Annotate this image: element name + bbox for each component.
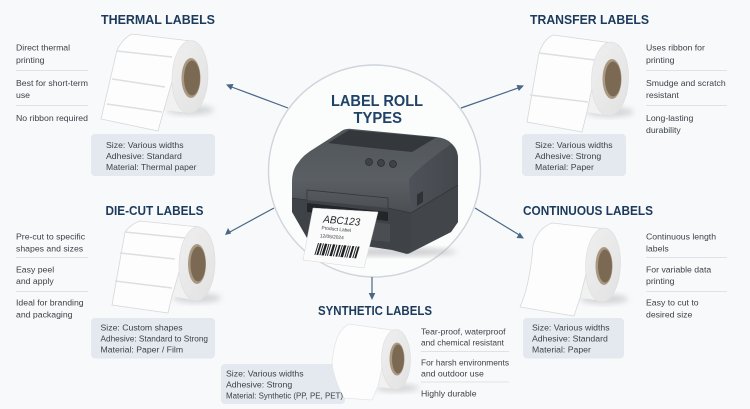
feature list: thermal: printing xyxy=(16,55,45,65)
feature list: continuous: Continuous length xyxy=(646,232,716,242)
printer xyxy=(292,129,458,268)
feature list: transfer: printing xyxy=(646,55,675,65)
feature list: continuous: printing xyxy=(646,276,675,286)
spec box: continuous xyxy=(523,318,624,358)
feature list: thermal xyxy=(16,42,88,123)
feature list: continuous: desired size xyxy=(646,310,693,320)
feature list: continuous: Easy to cut to xyxy=(646,298,699,308)
arrow: to synthetic labels xyxy=(369,277,375,300)
feature list: transfer xyxy=(646,42,727,135)
feature list: transfer: Smudge and scratch xyxy=(646,78,726,88)
printer right side xyxy=(409,144,458,213)
arrow: to continuous labels xyxy=(475,208,524,238)
printer slot xyxy=(307,203,388,221)
panel: die-cut labels xyxy=(16,204,221,358)
feature list: thermal: Direct thermal xyxy=(16,42,70,52)
feature list: transfer: durability xyxy=(646,125,681,135)
panel: thermal labels xyxy=(16,13,215,176)
spec text: synthetic: Material: Synthetic (PP, PE, PET) xyxy=(226,390,343,400)
spec text: synthetic: Size: Various widths xyxy=(226,368,304,378)
spec box: thermal: Material: Thermal paper xyxy=(106,162,197,172)
printer window xyxy=(328,130,436,152)
spec box: transfer xyxy=(522,134,626,176)
heading: thermal labels: THERMAL LABELS xyxy=(101,13,215,27)
heading: transfer labels: TRANSFER LABELS xyxy=(530,13,649,27)
spec box: transfer: Material: Paper xyxy=(535,162,594,172)
spec box: die-cut: Material: Paper / Film xyxy=(100,344,183,354)
heading: continuous labels: CONTINUOUS LABELS xyxy=(523,204,653,218)
arrow: to die-cut labels xyxy=(225,208,274,235)
feature list: die-cut: and packaging xyxy=(16,310,73,320)
panel: continuous labels xyxy=(520,204,727,358)
spec box: die-cut: Size: Custom shapes xyxy=(100,322,183,332)
feature list: die-cut: Easy peel xyxy=(16,264,54,274)
barcode xyxy=(314,243,360,258)
printer port xyxy=(417,191,423,206)
icon: transfer label roll xyxy=(527,35,634,132)
label text xyxy=(320,213,361,243)
feature list: continuous: For variable data xyxy=(646,264,711,274)
heading: synthetic labels: SYNTHETIC LABELS xyxy=(318,304,432,318)
spec box: thermal: Size: Various widths xyxy=(106,140,184,150)
spec box: thermal xyxy=(91,134,215,176)
feature list: synthetic xyxy=(421,326,510,398)
icon: synthetic label roll xyxy=(332,324,419,400)
feature list: die-cut: shapes and sizes xyxy=(16,244,84,254)
heading: die-cut labels: DIE-CUT LABELS xyxy=(106,204,204,218)
printer lower body xyxy=(292,180,458,254)
spec text: synthetic: Adhesive: Strong xyxy=(226,380,292,390)
feature list: synthetic: and chemical resistant xyxy=(421,338,505,348)
printer shadow xyxy=(333,248,457,256)
spec box background: synthetic xyxy=(221,364,345,404)
center circle xyxy=(268,65,480,277)
printer upper body xyxy=(292,129,458,213)
panel: transfer labels xyxy=(522,13,727,176)
panel: synthetic labels xyxy=(221,304,510,404)
feature list: continuous xyxy=(646,232,727,320)
printer front seam xyxy=(292,185,458,213)
label text: Product Label xyxy=(321,225,351,234)
arrow: to transfer labels xyxy=(461,85,524,108)
feature list: thermal: use xyxy=(16,90,30,100)
feature list: die-cut: Pre-cut to specific xyxy=(16,232,86,242)
label text: 12/05/2024 xyxy=(320,233,344,241)
spec box: transfer: Size: Various widths xyxy=(535,140,613,150)
feature list: die-cut: and apply xyxy=(16,276,54,286)
feature list: die-cut: Ideal for branding xyxy=(16,298,84,308)
printer lower right side xyxy=(408,185,458,254)
feature list: transfer: resistant xyxy=(646,90,679,100)
spec box: transfer: Adhesive: Strong xyxy=(535,151,601,161)
feature list: thermal: No ribbon required xyxy=(16,113,88,123)
title: LABEL ROLL xyxy=(331,93,423,110)
feature list: continuous: labels xyxy=(646,244,669,254)
printer buttons xyxy=(366,158,396,168)
printer lower slot piece xyxy=(368,222,390,242)
feature list: synthetic: Highly durable xyxy=(421,388,477,398)
spec box: die-cut xyxy=(91,318,215,358)
title xyxy=(331,93,423,127)
printed label xyxy=(303,208,378,268)
feature list: synthetic: and outdoor use xyxy=(421,368,484,378)
spec text: synthetic xyxy=(226,368,343,400)
title: TYPES xyxy=(354,110,402,127)
feature list: synthetic: For harsh environments xyxy=(421,358,510,368)
feature list: transfer: Long-lasting xyxy=(646,113,694,123)
spec box: die-cut: Adhesive: Standard to Strong xyxy=(100,334,208,344)
icon: thermal label roll xyxy=(101,34,214,131)
arrow: to thermal labels xyxy=(226,84,288,108)
feature list: synthetic: Tear-proof, waterproof xyxy=(421,326,506,336)
feature list: transfer: Uses ribbon for xyxy=(646,42,705,52)
spec box: thermal: Adhesive: Standard xyxy=(106,151,182,161)
icon: die-cut label roll xyxy=(112,221,221,313)
feature list: die-cut xyxy=(16,232,88,320)
spec box: continuous: Adhesive: Standard xyxy=(532,334,608,344)
spec box: continuous: Size: Various widths xyxy=(532,322,610,332)
icon: continuous label roll xyxy=(520,223,628,316)
feature list: thermal: Best for short-term xyxy=(16,78,88,88)
label text: ABC123 xyxy=(322,213,361,229)
spec box: continuous: Material: Paper xyxy=(532,344,591,354)
